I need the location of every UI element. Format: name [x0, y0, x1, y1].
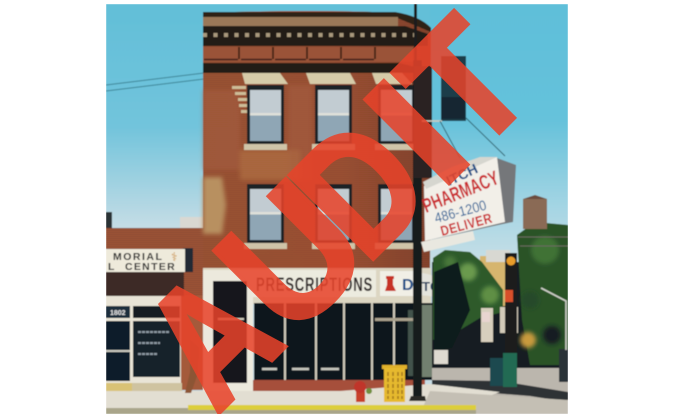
infographic canvas — [106, 4, 568, 414]
sign lettering: PHARMACY — [420, 167, 502, 218]
tree right — [517, 222, 568, 365]
sign: dutch: D — [402, 277, 414, 294]
sky right side — [430, 4, 568, 264]
photo: corner pharmacy building — [106, 4, 568, 414]
letter U: U — [181, 146, 403, 368]
street light and traffic signal — [505, 253, 517, 353]
sign: prescriptions: PRESCRIPTIONS — [256, 275, 373, 296]
utility pole — [409, 4, 426, 401]
storefront — [203, 268, 449, 392]
upper floor windows — [244, 85, 418, 150]
background street and trees — [432, 222, 568, 414]
sign lettering: ITCH — [444, 160, 480, 189]
trash can — [382, 365, 407, 402]
sign: memorial center — [106, 249, 185, 273]
sign: memorial center: L — [108, 261, 115, 273]
tree left — [433, 250, 503, 340]
distant street signs — [481, 308, 493, 342]
sign lettering: 486-1200 — [433, 197, 488, 226]
sidewalk and curb — [106, 384, 568, 414]
window lintels — [242, 73, 412, 84]
cornice — [203, 12, 431, 73]
letter I: I — [331, 47, 502, 218]
corner dark wall — [414, 66, 432, 178]
flower pot — [354, 381, 372, 402]
water tower — [523, 195, 547, 229]
small under-sign — [421, 231, 475, 252]
weathered brick patches — [203, 85, 312, 234]
sky — [106, 4, 436, 414]
main brick building — [203, 11, 431, 270]
letter D: D — [257, 84, 464, 292]
pale building behind trees — [480, 256, 508, 306]
pharmacy sign — [420, 157, 516, 252]
sign: memorial center: MORIAL — [113, 251, 163, 263]
neighbouring building — [106, 212, 205, 392]
sign lettering: DELIVER — [439, 210, 494, 239]
sign: dutch: TCH — [422, 279, 449, 294]
pedestrian — [184, 364, 197, 394]
sign: memorial center: CENTER — [125, 261, 176, 273]
green boxes — [503, 353, 517, 387]
sign: memorial center: ⚕ — [171, 250, 178, 264]
sign: prescriptions — [252, 270, 376, 297]
address number: 1802 — [110, 310, 126, 317]
sign lettering — [421, 163, 498, 236]
sign wires — [440, 118, 505, 158]
shop windows — [254, 303, 432, 380]
overhead wires — [106, 73, 204, 91]
brick quoins — [232, 86, 247, 113]
traffic light on arm — [422, 56, 466, 121]
second floor windows — [244, 184, 418, 249]
sign: dutch — [380, 270, 433, 296]
